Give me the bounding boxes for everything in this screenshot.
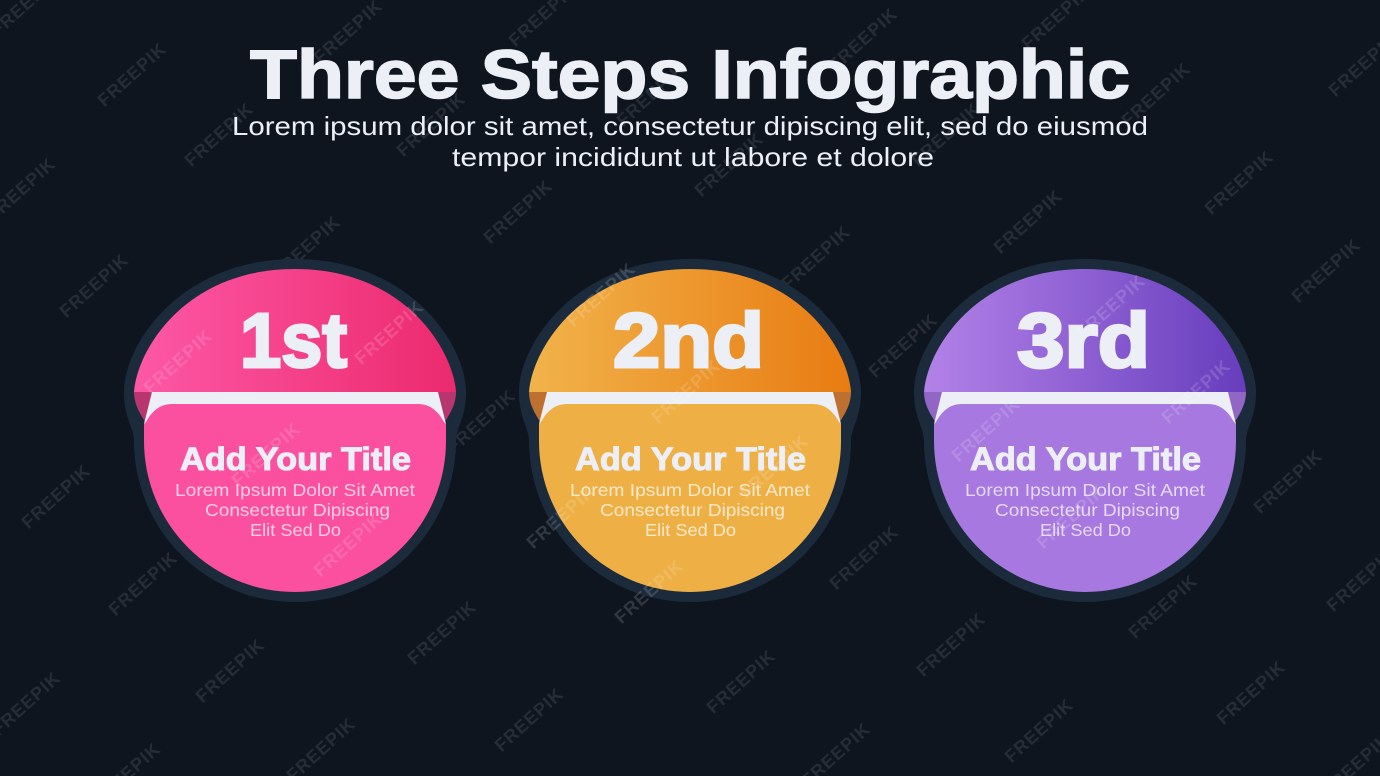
number: 2nd [613, 298, 764, 384]
card text: Lorem Ipsum Dolor Sit Amet [570, 480, 810, 500]
card watermarks overlay: FREEPIK [1158, 356, 1234, 427]
watermarks: FREEPIK [192, 635, 268, 706]
white ribbon [144, 392, 446, 424]
top cap [924, 269, 1246, 392]
watermarks: FREEPIK [94, 39, 170, 110]
watermarks: FREEPIK [1250, 446, 1326, 517]
card watermarks overlay: FREEPIK [351, 297, 427, 368]
card text: Consectetur Dipiscing [205, 500, 390, 520]
watermarks: FREEPIK [18, 461, 94, 532]
watermarks: FREEPIK [105, 548, 181, 619]
card text: Lorem Ipsum Dolor Sit Amet [965, 480, 1205, 500]
watermarks: FREEPIK [181, 99, 257, 170]
card watermarks overlay: FREEPIK [228, 419, 304, 490]
card text: Elit Sed Do [645, 520, 736, 540]
card text [175, 480, 415, 540]
card watermarks overlay: FREEPIK [1073, 271, 1149, 342]
card text [965, 480, 1205, 540]
number: 1st [240, 298, 347, 384]
watermarks: FREEPIK [393, 89, 469, 160]
watermarks: FREEPIK [691, 129, 767, 200]
outline ring [914, 259, 1256, 602]
card title: Add Your Title [180, 441, 411, 477]
panel: step 1 [124, 259, 466, 602]
watermarks: FREEPIK [56, 250, 132, 321]
watermarks: FREEPIK [825, 4, 901, 75]
card watermarks overlay: FREEPIK [736, 431, 812, 502]
watermarks: FREEPIK [1001, 695, 1077, 766]
fold shadows [924, 392, 1246, 423]
watermarks: FREEPIK [443, 386, 519, 457]
fold shadows [134, 392, 456, 423]
watermarks: FREEPIK [1288, 235, 1364, 306]
card watermarks overlay: FREEPIK [140, 326, 216, 397]
subtitle: tempor incididunt ut labore et dolore [452, 142, 934, 172]
subtitle: Lorem ipsum dolor sit amet, consectetur dipiscing elit, sed do eiusmod [232, 111, 1148, 141]
card text: Consectetur Dipiscing [600, 500, 785, 520]
card watermarks overlay: FREEPIK [1033, 481, 1109, 552]
card watermarks overlay: FREEPIK [563, 259, 639, 330]
watermarks: FREEPIK [1213, 657, 1289, 728]
card title: Add Your Title [575, 441, 806, 477]
watermarks: FREEPIK [1201, 147, 1277, 218]
number: 3rd [1017, 298, 1150, 384]
card text: Elit Sed Do [250, 520, 341, 540]
card body [144, 404, 446, 592]
card text [570, 480, 810, 540]
card watermarks overlay: FREEPIK [611, 556, 687, 627]
card watermarks overlay: FREEPIK [648, 356, 724, 427]
card text: Consectetur Dipiscing [995, 500, 1180, 520]
card title: Add Your Title [970, 441, 1201, 477]
card watermarks overlay: FREEPIK [523, 481, 599, 552]
top cap [134, 269, 456, 392]
watermarks: FREEPIK [1118, 59, 1194, 130]
card watermarks overlay [140, 259, 1234, 627]
watermarks: FREEPIK [480, 176, 556, 247]
outline ring [124, 259, 466, 602]
fold shadows [529, 392, 851, 423]
watermarks: FREEPIK [913, 609, 989, 680]
watermarks: FREEPIK [491, 684, 567, 755]
outline ring [519, 259, 861, 602]
panel: step 3 [914, 259, 1256, 602]
white ribbon [539, 392, 841, 424]
title: Three Steps Infographic [250, 36, 1130, 113]
watermarks: FREEPIK [1125, 571, 1201, 642]
card watermarks overlay: FREEPIK [948, 394, 1024, 465]
watermarks: FREEPIK [908, 99, 984, 170]
white ribbon [934, 392, 1236, 424]
watermarks: FREEPIK [865, 310, 941, 381]
watermarks: FREEPIK [703, 646, 779, 717]
panel: step 2 [519, 259, 861, 602]
subtitle [232, 111, 1148, 172]
top cap [529, 269, 851, 392]
watermarks: FREEPIK [268, 212, 344, 283]
card body [539, 404, 841, 592]
card watermarks overlay: FREEPIK [310, 509, 386, 580]
card text: Elit Sed Do [1040, 520, 1131, 540]
card body [934, 404, 1236, 592]
watermarks: FREEPIK [404, 597, 480, 668]
watermarks: FREEPIK [778, 222, 854, 293]
card text: Lorem Ipsum Dolor Sit Amet [175, 480, 415, 500]
watermarks: FREEPIK [826, 522, 902, 593]
watermarks: FREEPIK [613, 59, 689, 130]
watermarks: FREEPIK [990, 186, 1066, 257]
